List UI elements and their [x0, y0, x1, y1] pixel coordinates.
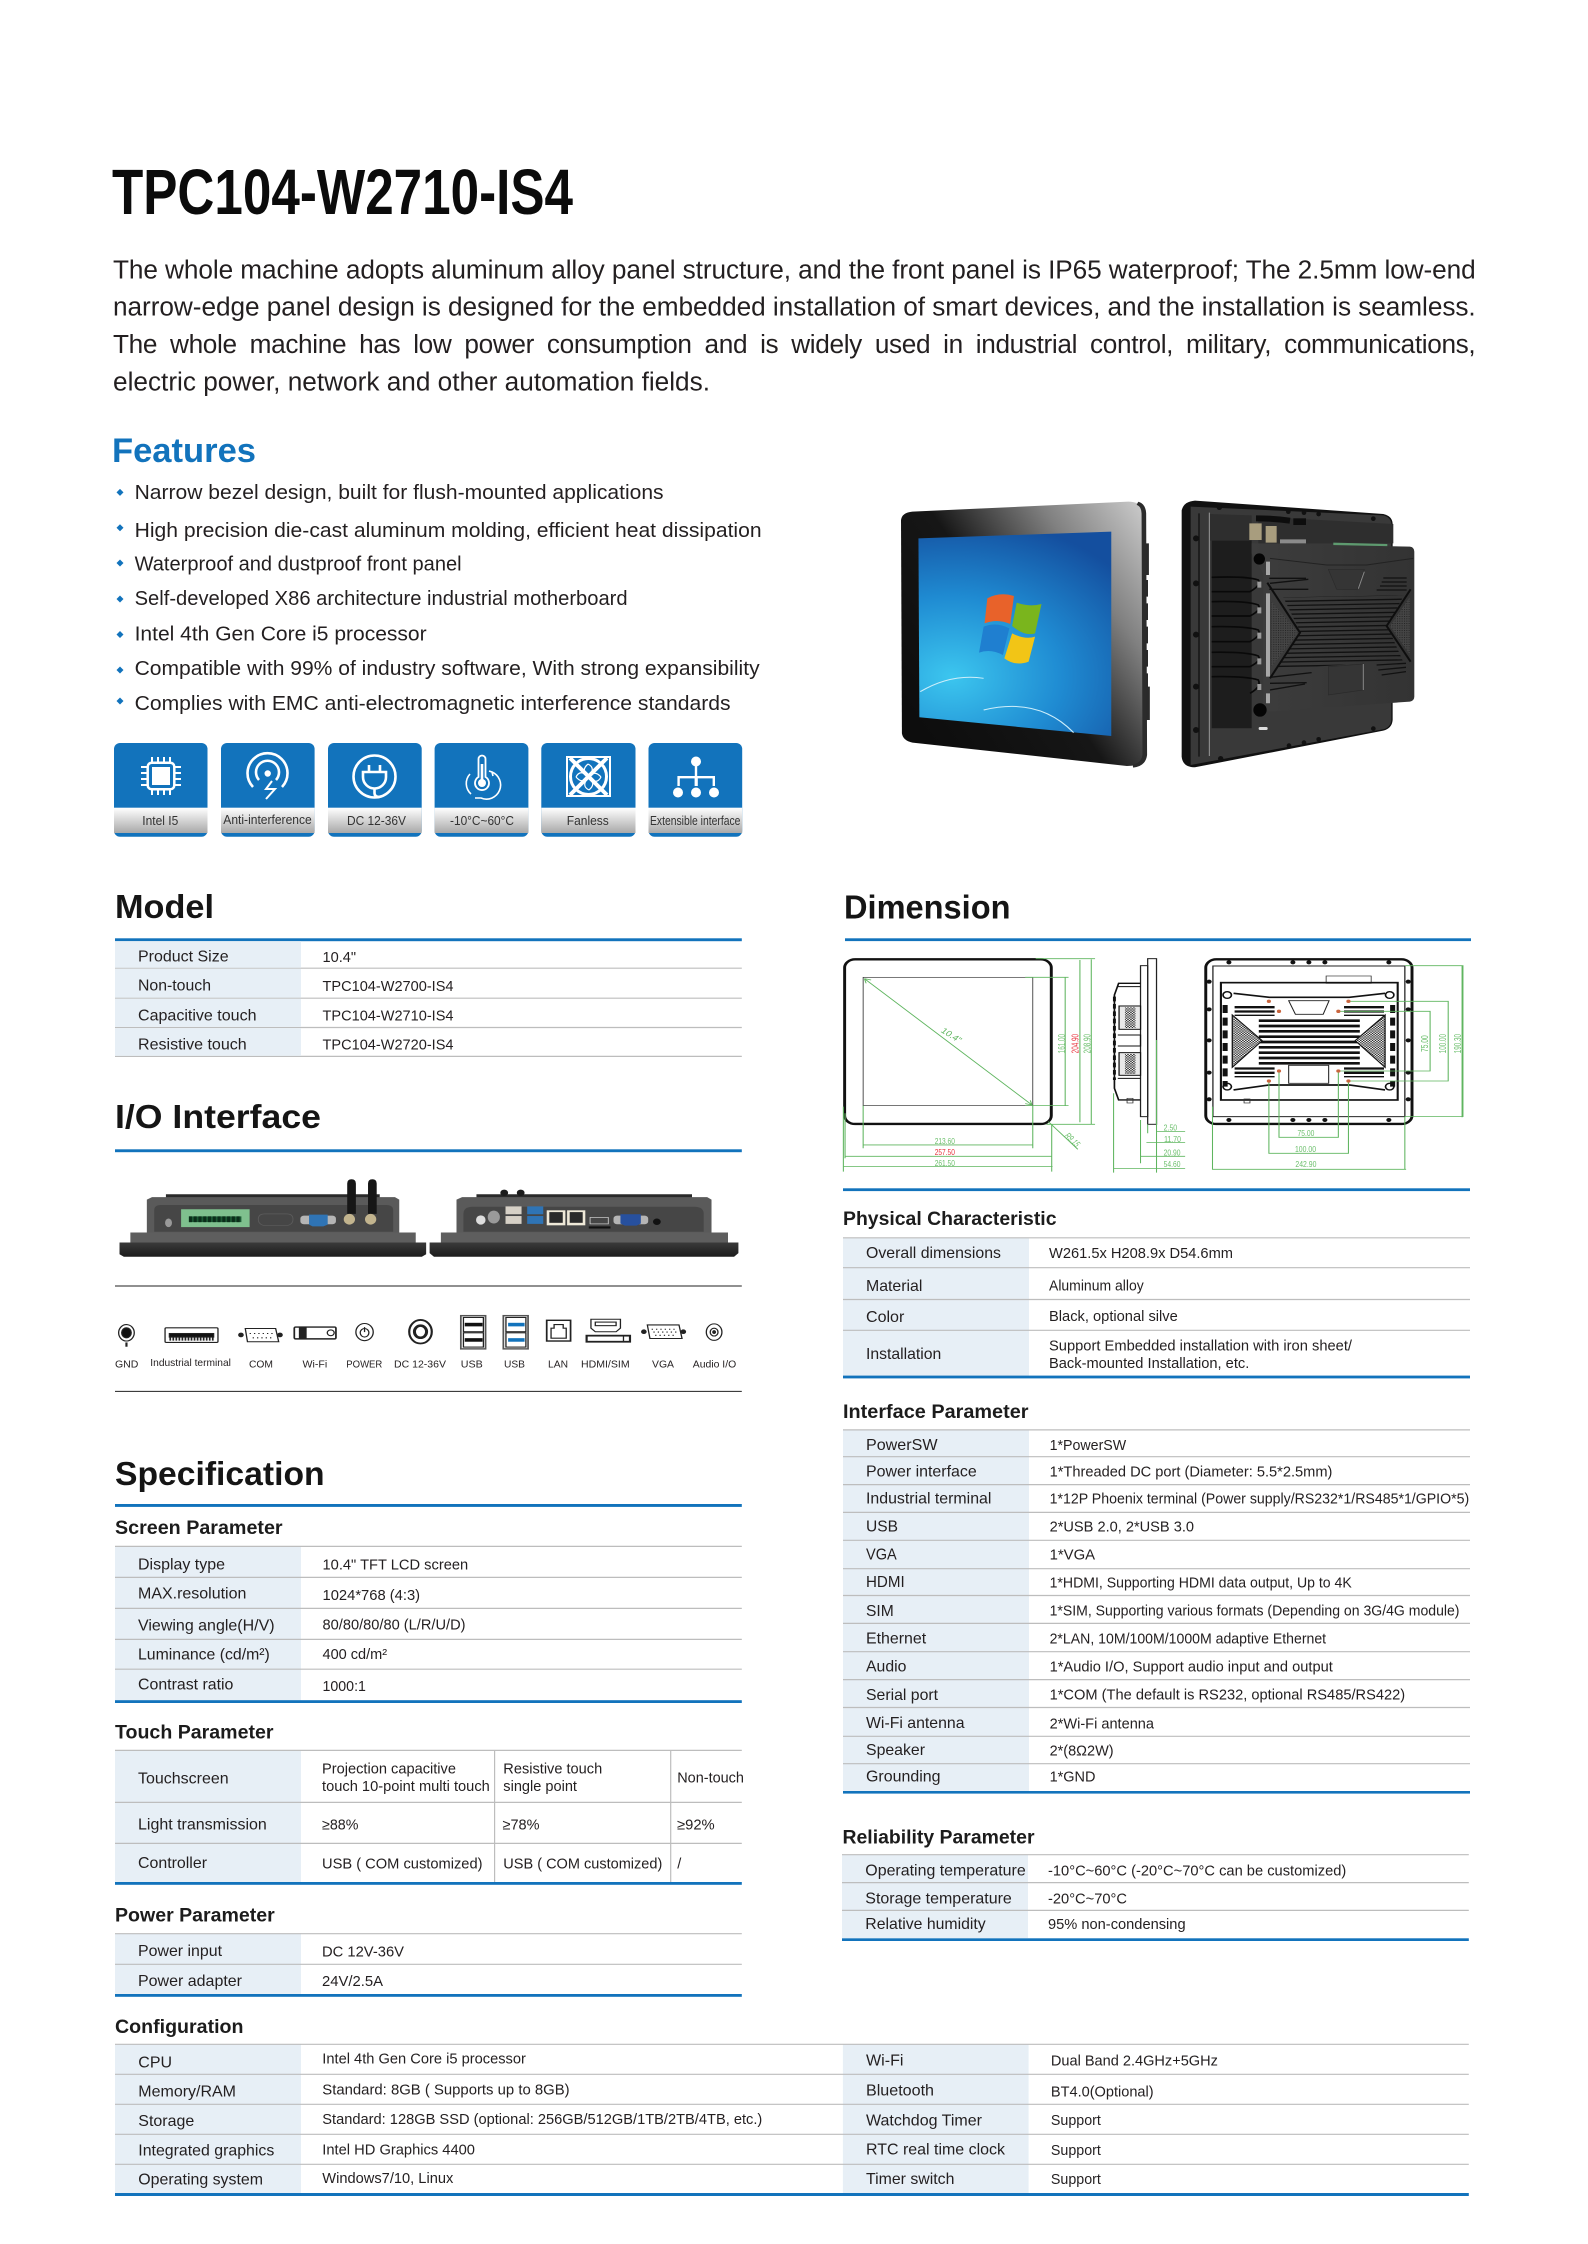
- row: PowerSW: 1*PowerSW: [1050, 1438, 1126, 1454]
- row: SIM: SIM: [866, 1603, 894, 1620]
- heading: Interface Parameter: Interface Parameter: [843, 1402, 1029, 1423]
- front outline: 204.90: [1070, 1034, 1081, 1053]
- intro paragraph: The whole machine has low power consumption and is widely used in industrial control, military, communications,: [113, 329, 1476, 359]
- row: Resistive touch: [115, 1028, 454, 1056]
- row: Non-touch: [115, 969, 454, 998]
- row: Timer switch: Support: [1051, 2172, 1101, 2188]
- row: Resistive touch: TPC104-W2720-IS4: [322, 1038, 454, 1054]
- row: Contrast ratio: [138, 1676, 366, 1695]
- row: Touchscreen: Resistive touch: [503, 1762, 602, 1778]
- row: Non-touch: Non-touch: [138, 978, 211, 995]
- row: Contrast ratio: Contrast ratio: [138, 1676, 233, 1694]
- icon badge: Fanless: Fanless: [567, 813, 609, 828]
- row: RTC real time clock: [866, 2141, 1101, 2159]
- row: Storage temperature: Storage temperature: [865, 1890, 1012, 1908]
- row: Memory/RAM: Standard: 8GB ( Supports up to 8GB): [322, 2082, 570, 2098]
- row: Memory/RAM: Memory/RAM: [138, 2083, 236, 2100]
- row: MAX.resolution: [138, 1585, 420, 1604]
- front outline: 213.60: [935, 1137, 955, 1146]
- row: Integrated graphics: Integrated graphics: [138, 2142, 274, 2159]
- row: Light transmission: Light transmission: [138, 1817, 267, 1834]
- row: Display type: 10.4" TFT LCD screen: [322, 1557, 468, 1573]
- port labels: [115, 1286, 742, 1391]
- port labels: USB: [504, 1358, 525, 1370]
- row: Power interface: 1*Threaded DC port (Diameter: 5.5*2.5mm): [1050, 1465, 1332, 1481]
- row: Product Size: 10.4": [322, 950, 356, 966]
- row: Viewing angle: Viewing angle(H/V): [138, 1618, 275, 1635]
- heading: Model: Model: [115, 888, 214, 925]
- row: Installation: Support Embedded installation with iron sheet/: [1049, 1339, 1353, 1355]
- port labels: Wi-Fi: [302, 1358, 327, 1370]
- row: Capacitive touch: [115, 999, 454, 1027]
- product photo: front and back of the panel PC: [901, 501, 1414, 767]
- feature list: Intel 4th Gen Core i5 processor: [135, 624, 427, 646]
- front outline: 261.50: [935, 1159, 955, 1168]
- rear outline: 190.30: [1452, 1034, 1463, 1053]
- heading: Reliability Parameter: Reliability Parameter: [842, 1827, 1035, 1848]
- row: Non-touch: TPC104-W2700-IS4: [322, 979, 454, 995]
- icon badge: Intel I5: [114, 743, 208, 837]
- row: SIM: [866, 1603, 1460, 1620]
- row: Storage: Storage: [138, 2113, 194, 2130]
- row: Touchscreen: [138, 1762, 744, 1795]
- row: Storage temperature: -20°C~70°C: [1048, 1892, 1127, 1908]
- row: Storage: [138, 2112, 762, 2130]
- row: Installation: Installation: [866, 1346, 941, 1363]
- right I/O panel: [430, 1190, 738, 1257]
- row: Color: Color: [866, 1309, 905, 1326]
- panel: Reliability Parameter table: [842, 1855, 1469, 1941]
- port labels: VGA: [652, 1358, 674, 1370]
- heading: Configuration: Configuration: [115, 2017, 244, 2038]
- row: Timer switch: [866, 2171, 1101, 2188]
- heading: Screen Parameter: Screen Parameter: [115, 1518, 283, 1539]
- row: Serial port: Serial port: [866, 1687, 939, 1704]
- rear outline: 242.90: [1295, 1160, 1316, 1169]
- row: Operating system: Operating system: [138, 2172, 263, 2189]
- row: Industrial terminal: [866, 1490, 1469, 1508]
- row: Wi-Fi: [866, 2052, 1218, 2069]
- row: Speaker: 2*(8Ω2W): [1050, 1744, 1114, 1760]
- port labels: LAN: [548, 1358, 568, 1370]
- row: USB: USB: [866, 1518, 898, 1535]
- row: Light transmission: ≥78%: [502, 1818, 540, 1834]
- row: Capacitive touch: Capacitive touch: [138, 1007, 256, 1024]
- row: CPU: Intel 4th Gen Core i5 processor: [322, 2051, 526, 2067]
- row: Material: Aluminum alloy: [1049, 1278, 1144, 1294]
- side outline: 54.60: [1164, 1160, 1181, 1169]
- intro paragraph: narrow-edge panel design is designed for the embedded installation of smart devices, and the installation is seamless.: [113, 292, 1476, 322]
- icon badge: DC 12-36V: DC 12-36V: [347, 813, 406, 828]
- feature list: [116, 482, 762, 715]
- front outline: 10.4": [939, 1026, 964, 1044]
- row: Watchdog Timer: Watchdog Timer: [866, 2112, 983, 2129]
- row: Touchscreen: Touchscreen: [138, 1770, 229, 1787]
- row: Wi-Fi antenna: 2*Wi-Fi antenna: [1050, 1716, 1155, 1732]
- row: USB: 2*USB 2.0, 2*USB 3.0: [1050, 1519, 1194, 1535]
- row: MAX.resolution: 1024*768 (4:3): [322, 1588, 420, 1604]
- heading: Dimension: Dimension: [844, 888, 1010, 925]
- left I/O panel: [120, 1179, 426, 1257]
- row: Operating temperature: [865, 1863, 1346, 1880]
- row: MAX.resolution: MAX.resolution: [138, 1585, 246, 1602]
- front outline: 208.90: [1082, 1034, 1093, 1053]
- row: Touchscreen: Projection capacitive: [322, 1762, 456, 1778]
- front outline: 161.00: [1056, 1034, 1067, 1053]
- port labels: USB: [461, 1358, 483, 1370]
- panel: Screen Parameter table: [115, 1546, 742, 1703]
- icon badge: Extensible interface: [648, 743, 742, 837]
- port labels: COM: [249, 1358, 273, 1370]
- row: Power input: Power input: [138, 1943, 223, 1960]
- icon badge: DC 12-36V: [328, 743, 422, 837]
- icon badge: Extensible interface: Extensible interface: [650, 813, 740, 828]
- feature list: Waterproof and dustproof front panel: [135, 553, 462, 575]
- row: Power interface: [866, 1464, 1332, 1481]
- row: Installation: [866, 1339, 1353, 1372]
- panel: Interface Parameter table: [843, 1430, 1470, 1794]
- row: Serial port: [866, 1687, 1405, 1704]
- row: Display type: Display type: [138, 1556, 225, 1573]
- row: Grounding: 1*GND: [1050, 1770, 1096, 1786]
- row: Viewing angle: [138, 1617, 466, 1635]
- back view: [1182, 501, 1414, 767]
- heading: Specification: Specification: [115, 1455, 325, 1492]
- row: RTC real time clock: Support: [1051, 2143, 1101, 2159]
- row: Grounding: Grounding: [866, 1769, 940, 1786]
- row: Speaker: Speaker: [866, 1742, 926, 1759]
- row: Operating temperature: -10°C~60°C (-20°C~70°C can be customized): [1048, 1864, 1346, 1880]
- row: Power adapter: 24V/2.5A: [322, 1974, 383, 1990]
- icon badge: Fanless: [541, 743, 636, 837]
- row: CPU: [138, 2051, 526, 2071]
- front outline: 257.50: [935, 1148, 955, 1157]
- row: Wi-Fi antenna: Wi-Fi antenna: [866, 1715, 965, 1732]
- heading: Touch Parameter: Touch Parameter: [115, 1722, 274, 1744]
- row: HDMI: 1*HDMI, Supporting HDMI data output, Up to 4K: [1050, 1576, 1352, 1592]
- port symbols: [119, 1316, 722, 1349]
- row: Watchdog Timer: Support: [1051, 2113, 1101, 2129]
- row: Audio: Audio: [866, 1659, 907, 1676]
- panel: Power Parameter table: [115, 1934, 742, 1997]
- row: Controller: USB ( COM customized): [503, 1857, 662, 1873]
- row: RTC real time clock: RTC real time clock: [866, 2141, 1006, 2158]
- heading: Power Parameter: Power Parameter: [115, 1905, 275, 1926]
- side outline: 11.70: [1164, 1135, 1181, 1144]
- row: Power adapter: Power adapter: [138, 1973, 243, 1990]
- feature list: Compatible with 99% of industry software, With strong expansibility: [135, 658, 760, 680]
- row: VGA: [866, 1547, 1095, 1564]
- front outline: [843, 959, 1095, 1172]
- row: Overall dimensions: Overall dimensions: [866, 1245, 1001, 1262]
- rear outline: 100.00: [1437, 1034, 1448, 1053]
- row: Audio: [866, 1659, 1333, 1676]
- row: Integrated graphics: [138, 2142, 475, 2159]
- row: Contrast ratio: 1000:1: [322, 1679, 366, 1695]
- row: Light transmission: [138, 1817, 715, 1834]
- row: Relative humidity: [865, 1916, 1186, 1933]
- row: PowerSW: [866, 1437, 1126, 1454]
- feature list: Narrow bezel design, built for flush-mounted applications: [135, 482, 664, 504]
- row: Operating system: Windows7/10, Linux: [322, 2171, 454, 2187]
- row: Resistive touch: Resistive touch: [138, 1036, 247, 1053]
- row: Power adapter: [138, 1973, 383, 1990]
- row: Relative humidity: 95% non-condensing: [1048, 1917, 1186, 1933]
- port labels: DC 12-36V: [394, 1358, 446, 1370]
- row: Light transmission: ≥92%: [677, 1818, 715, 1834]
- row: Display type: [138, 1556, 468, 1573]
- row: Speaker: [866, 1742, 1114, 1760]
- row: Storage temperature: [865, 1890, 1127, 1908]
- row: VGA: VGA: [866, 1547, 897, 1564]
- row: Memory/RAM: [138, 2082, 570, 2100]
- rear outline: 100.00: [1295, 1145, 1316, 1154]
- rear outline: 75.00: [1419, 1035, 1430, 1052]
- side outline: [1114, 959, 1185, 1173]
- row: Industrial terminal: Industrial terminal: [866, 1490, 991, 1508]
- row: Touchscreen: touch 10-point multi touch: [322, 1779, 490, 1795]
- row: Operating temperature: Operating temperature: [865, 1863, 1026, 1880]
- side outline: 2.50: [1164, 1124, 1177, 1132]
- row: Luminance: Luminance (cd/m²): [138, 1646, 270, 1663]
- heading: Physical Characteristic: Physical Characteristic: [843, 1209, 1057, 1230]
- row: Grounding: [866, 1769, 1096, 1786]
- row: Serial port: 1*COM (The default is RS232, optional RS485/RS422): [1050, 1688, 1405, 1704]
- intro paragraph: electric power, network and other automation fields.: [113, 366, 710, 396]
- intro paragraph: The whole machine adopts aluminum alloy panel structure, and the front panel is IP65 waterproof; The 2.5mm low-end: [113, 255, 1476, 285]
- panel: Model table: [115, 938, 742, 1056]
- row: Wi-Fi: Dual Band 2.4GHz+5GHz: [1051, 2053, 1218, 2069]
- row: Touchscreen: single point: [503, 1779, 577, 1795]
- panel: Physical Characteristic table: [843, 1238, 1470, 1378]
- row: Product Size: [115, 941, 356, 968]
- row: Overall dimensions: [866, 1245, 1233, 1262]
- row: Touchscreen: Non-touch: [677, 1770, 744, 1786]
- panel: Configuration table: [115, 2044, 1469, 2196]
- row: Audio: 1*Audio I/O, Support audio input and output: [1050, 1660, 1333, 1676]
- row: Industrial terminal: 1*12P Phoenix terminal (Power supply/RS232*1/RS485*1/GPIO*5): [1050, 1492, 1469, 1508]
- row: USB: [866, 1518, 1194, 1535]
- row: Bluetooth: BT4.0(Optional): [1051, 2084, 1154, 2100]
- row: Color: [866, 1309, 1178, 1326]
- icon badge: Anti-interference: Anti-interference: [223, 812, 312, 827]
- row: Power interface: Power interface: [866, 1464, 977, 1481]
- row: Watchdog Timer: [866, 2112, 1101, 2129]
- feature list: Complies with EMC anti-electromagnetic interference standards: [135, 693, 731, 715]
- icon badge: temperature: [435, 743, 528, 837]
- row: Storage: Standard: 128GB SSD (optional: 256GB/512GB/1TB/2TB/4TB, etc.): [322, 2112, 762, 2128]
- row: Timer switch: Timer switch: [866, 2171, 954, 2188]
- row: HDMI: HDMI: [866, 1574, 905, 1591]
- row: CPU: CPU: [138, 2054, 172, 2071]
- port labels: HDMI/SIM: [581, 1358, 630, 1370]
- dimension drawing: [843, 959, 1463, 1173]
- port labels: Industrial terminal: [150, 1357, 231, 1369]
- row: Ethernet: Ethernet: [866, 1630, 927, 1647]
- icon badge: temperature: -10°C~60°C: [450, 813, 514, 828]
- row: HDMI: [866, 1574, 1352, 1592]
- photo: I/O panels: [119, 1179, 738, 1349]
- row: Viewing angle: 80/80/80/80 (L/R/U/D): [322, 1617, 466, 1633]
- icon badge: Anti-interference: [221, 743, 315, 837]
- row: Power input: [138, 1943, 404, 1960]
- row: Wi-Fi: Wi-Fi: [866, 2052, 904, 2069]
- feature list: High precision die-cast aluminum molding, efficient heat dissipation: [135, 520, 762, 542]
- feature list: Self-developed X86 architecture industrial motherboard: [135, 588, 628, 610]
- row: Material: Material: [866, 1278, 922, 1295]
- row: VGA: 1*VGA: [1050, 1548, 1095, 1564]
- title: TPC104-W2710-IS4: [112, 156, 573, 228]
- port labels: POWER: [346, 1358, 383, 1370]
- row: Ethernet: 2*LAN, 10M/100M/1000M adaptive Ethernet: [1050, 1631, 1326, 1647]
- intro paragraph: [113, 255, 1476, 396]
- front outline: R9.15: [1062, 1131, 1083, 1148]
- panel: Touch Parameter table: [115, 1750, 744, 1885]
- row: Controller: Controller: [138, 1855, 208, 1872]
- row: Controller: USB ( COM customized): [322, 1857, 482, 1873]
- row: Operating system: [138, 2171, 454, 2189]
- heading: I/O Interface: I/O Interface: [115, 1098, 321, 1135]
- row: PowerSW: PowerSW: [866, 1437, 938, 1454]
- icon badge: Intel I5: Intel I5: [142, 813, 178, 828]
- row: Capacitive touch: TPC104-W2710-IS4: [322, 1009, 454, 1025]
- port labels: Audio I/O: [693, 1358, 736, 1370]
- front view: [901, 502, 1150, 766]
- rear outline: 75.00: [1298, 1129, 1314, 1138]
- row: Installation: Back-mounted Installation, etc.: [1049, 1356, 1249, 1372]
- port labels: GND: [115, 1358, 139, 1370]
- side outline: 20.90: [1164, 1149, 1181, 1157]
- row: Bluetooth: [866, 2083, 1154, 2100]
- row: Controller: [138, 1855, 682, 1873]
- row: Power input: DC 12V-36V: [322, 1944, 404, 1960]
- row: Luminance: 400 cd/m²: [322, 1647, 387, 1663]
- row: Bluetooth: Bluetooth: [866, 2083, 934, 2100]
- row: Color: Black, optional silve: [1049, 1309, 1178, 1325]
- row: Ethernet: [866, 1630, 1326, 1647]
- row: Light transmission: ≥88%: [322, 1818, 358, 1834]
- row: SIM: 1*SIM, Supporting various formats (Depending on 3G/4G module): [1050, 1604, 1460, 1620]
- row: Material: [866, 1278, 1144, 1295]
- row: Overall dimensions: W261.5x H208.9x D54.6mm: [1049, 1246, 1233, 1262]
- row: Controller: /: [677, 1857, 682, 1873]
- heading: Features: Features: [112, 432, 256, 470]
- row: Luminance: [138, 1646, 387, 1663]
- row: Product Size: Product Size: [138, 948, 229, 965]
- row: Integrated graphics: Intel HD Graphics 4400: [322, 2142, 475, 2158]
- rear outline: [1206, 959, 1463, 1169]
- row: Wi-Fi antenna: [866, 1715, 1155, 1732]
- row: Relative humidity: Relative humidity: [865, 1916, 986, 1933]
